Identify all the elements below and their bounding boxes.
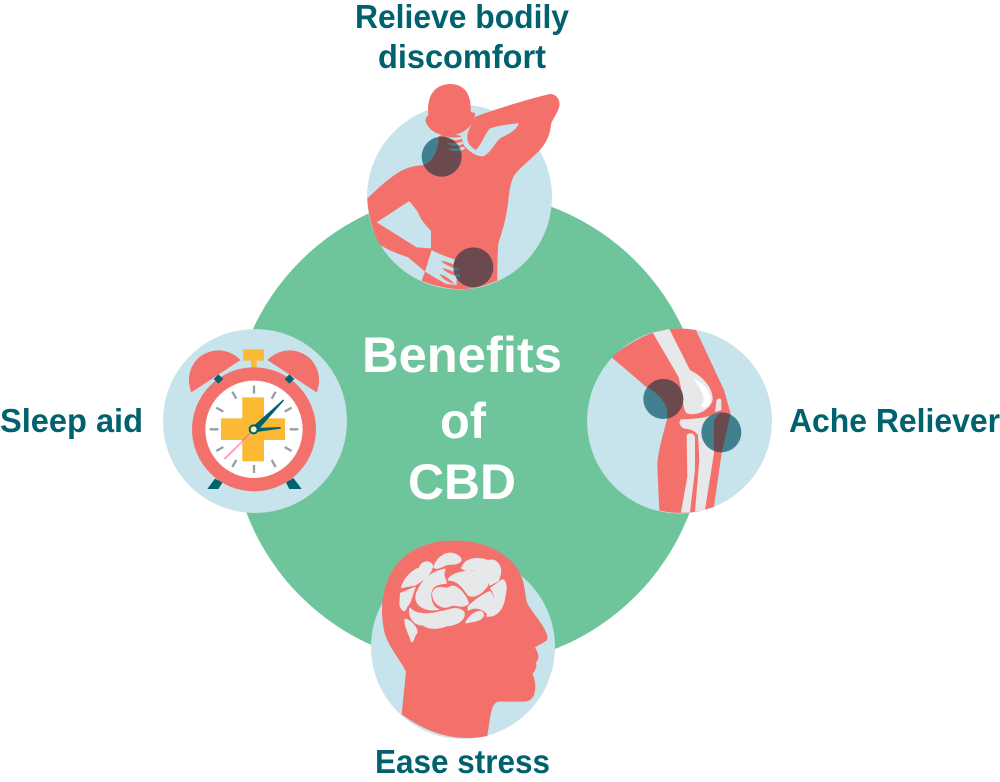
panel: ease stress — [371, 541, 555, 739]
clock ticks — [210, 386, 298, 473]
brain — [400, 553, 506, 642]
clock bell brackets — [214, 374, 294, 384]
badge background: right — [587, 328, 772, 514]
label: ease stress: Ease stress — [375, 743, 550, 780]
pain marker: neck — [422, 136, 462, 177]
icon: alarm clock — [189, 349, 319, 491]
badge background: left — [163, 329, 347, 513]
pain marker: above knee — [643, 379, 684, 419]
panel: sleep aid — [163, 329, 347, 513]
title: Benefits of CBD: CBD — [408, 454, 516, 510]
clock hands — [224, 432, 252, 459]
head silhouette — [382, 541, 547, 738]
panel: relieve bodily discomfort — [367, 84, 560, 290]
label: sleep aid: Sleep aid — [0, 402, 143, 439]
bone highlight — [693, 378, 711, 408]
pain marker: below knee — [701, 412, 741, 453]
waist hand — [425, 250, 457, 285]
medical cross — [221, 397, 285, 461]
title: Benefits of CBD — [362, 327, 562, 510]
icon: head with brain — [382, 541, 547, 738]
central green circle — [231, 192, 705, 666]
leg — [612, 328, 731, 513]
panel: ache reliever — [587, 328, 772, 514]
badge background: top — [367, 104, 552, 290]
badge background: bottom — [371, 555, 555, 739]
neck finger gaps — [446, 136, 465, 151]
body silhouette — [367, 84, 560, 289]
bones — [653, 329, 721, 513]
pain marker: lower back — [453, 247, 493, 287]
label: relieve bodily discomfort — [355, 0, 570, 75]
clock legs — [207, 478, 302, 489]
clock top knob — [243, 349, 264, 372]
clock body — [192, 367, 316, 491]
icon: knee joint — [612, 328, 741, 513]
label: relieve bodily discomfort: discomfort — [378, 38, 546, 75]
clock bells — [189, 350, 319, 392]
icon: body with neck and back pain — [367, 84, 560, 289]
title: Benefits of CBD: of — [440, 393, 486, 449]
title: Benefits of CBD: Benefits — [362, 327, 562, 383]
